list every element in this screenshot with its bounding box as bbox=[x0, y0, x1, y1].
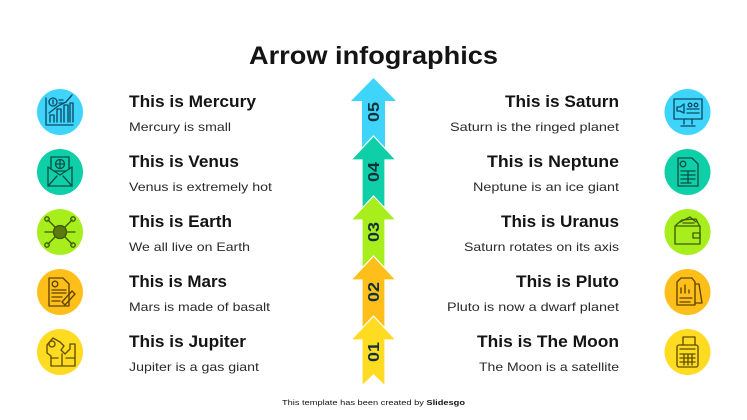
left column: Jupiter bbox=[37, 329, 260, 375]
icon: growth chart bbox=[37, 89, 83, 135]
icon: document with pencil bbox=[37, 269, 83, 315]
arrow 03: 03 bbox=[366, 222, 383, 242]
arrow 02: 02 bbox=[366, 282, 383, 302]
description: We all live on Earth bbox=[129, 240, 250, 254]
arrow 01: 01 bbox=[366, 342, 383, 362]
left column: Mars bbox=[37, 269, 271, 315]
heading: This is Venus bbox=[129, 152, 239, 171]
right column: Saturn bbox=[450, 89, 710, 135]
description: Neptune is an ice giant bbox=[473, 180, 620, 194]
arrow 05 bbox=[351, 78, 396, 147]
description: Mercury is small bbox=[129, 120, 231, 134]
heading: This is Jupiter bbox=[129, 332, 246, 351]
arrow 04: 04 bbox=[366, 162, 383, 182]
icon: invoice bbox=[664, 149, 710, 195]
heading: This is Mars bbox=[129, 272, 227, 291]
description: Saturn rotates on its axis bbox=[464, 240, 619, 254]
description: The Moon is a satellite bbox=[479, 360, 619, 374]
heading: This is Mercury bbox=[129, 92, 257, 111]
heading: This is Saturn bbox=[505, 92, 619, 111]
right column: Pluto bbox=[447, 269, 710, 315]
icon: shopping tags and report bbox=[664, 269, 710, 315]
heading: This is Uranus bbox=[501, 212, 619, 231]
icon: envelope bbox=[37, 149, 83, 195]
heading: This is Earth bbox=[129, 212, 232, 231]
icon: puzzle bbox=[37, 329, 83, 375]
left column: Earth bbox=[37, 209, 250, 255]
footer credit: This template has been created by Slidesgo bbox=[282, 398, 466, 407]
description: Pluto is now a dwarf planet bbox=[447, 300, 620, 314]
description: Saturn is the ringed planet bbox=[450, 120, 620, 134]
arrow 05: 05 bbox=[366, 102, 383, 122]
description: Mars is made of basalt bbox=[129, 300, 271, 314]
arrow 03 bbox=[351, 196, 396, 267]
central arrow stack bbox=[351, 78, 396, 386]
arrow 02 bbox=[351, 256, 396, 327]
description: Venus is extremely hot bbox=[129, 180, 273, 194]
right column: Neptune bbox=[473, 149, 710, 195]
heading: This is Neptune bbox=[487, 152, 619, 171]
icon: calculator bbox=[664, 329, 710, 375]
right column: Uranus bbox=[464, 209, 710, 255]
title: Arrow infographics bbox=[249, 42, 498, 70]
icon: coin network bbox=[37, 209, 83, 255]
heading: This is The Moon bbox=[477, 332, 619, 351]
arrow 04 bbox=[351, 136, 396, 207]
icon: monitor bbox=[664, 89, 710, 135]
arrow 01 bbox=[351, 316, 396, 386]
description: Jupiter is a gas giant bbox=[129, 360, 260, 374]
left column: Venus bbox=[37, 149, 273, 195]
heading: This is Pluto bbox=[516, 272, 619, 291]
left column: Mercury bbox=[37, 89, 257, 135]
icon: wallet with cash bbox=[664, 209, 710, 255]
right column: The Moon bbox=[477, 329, 710, 375]
